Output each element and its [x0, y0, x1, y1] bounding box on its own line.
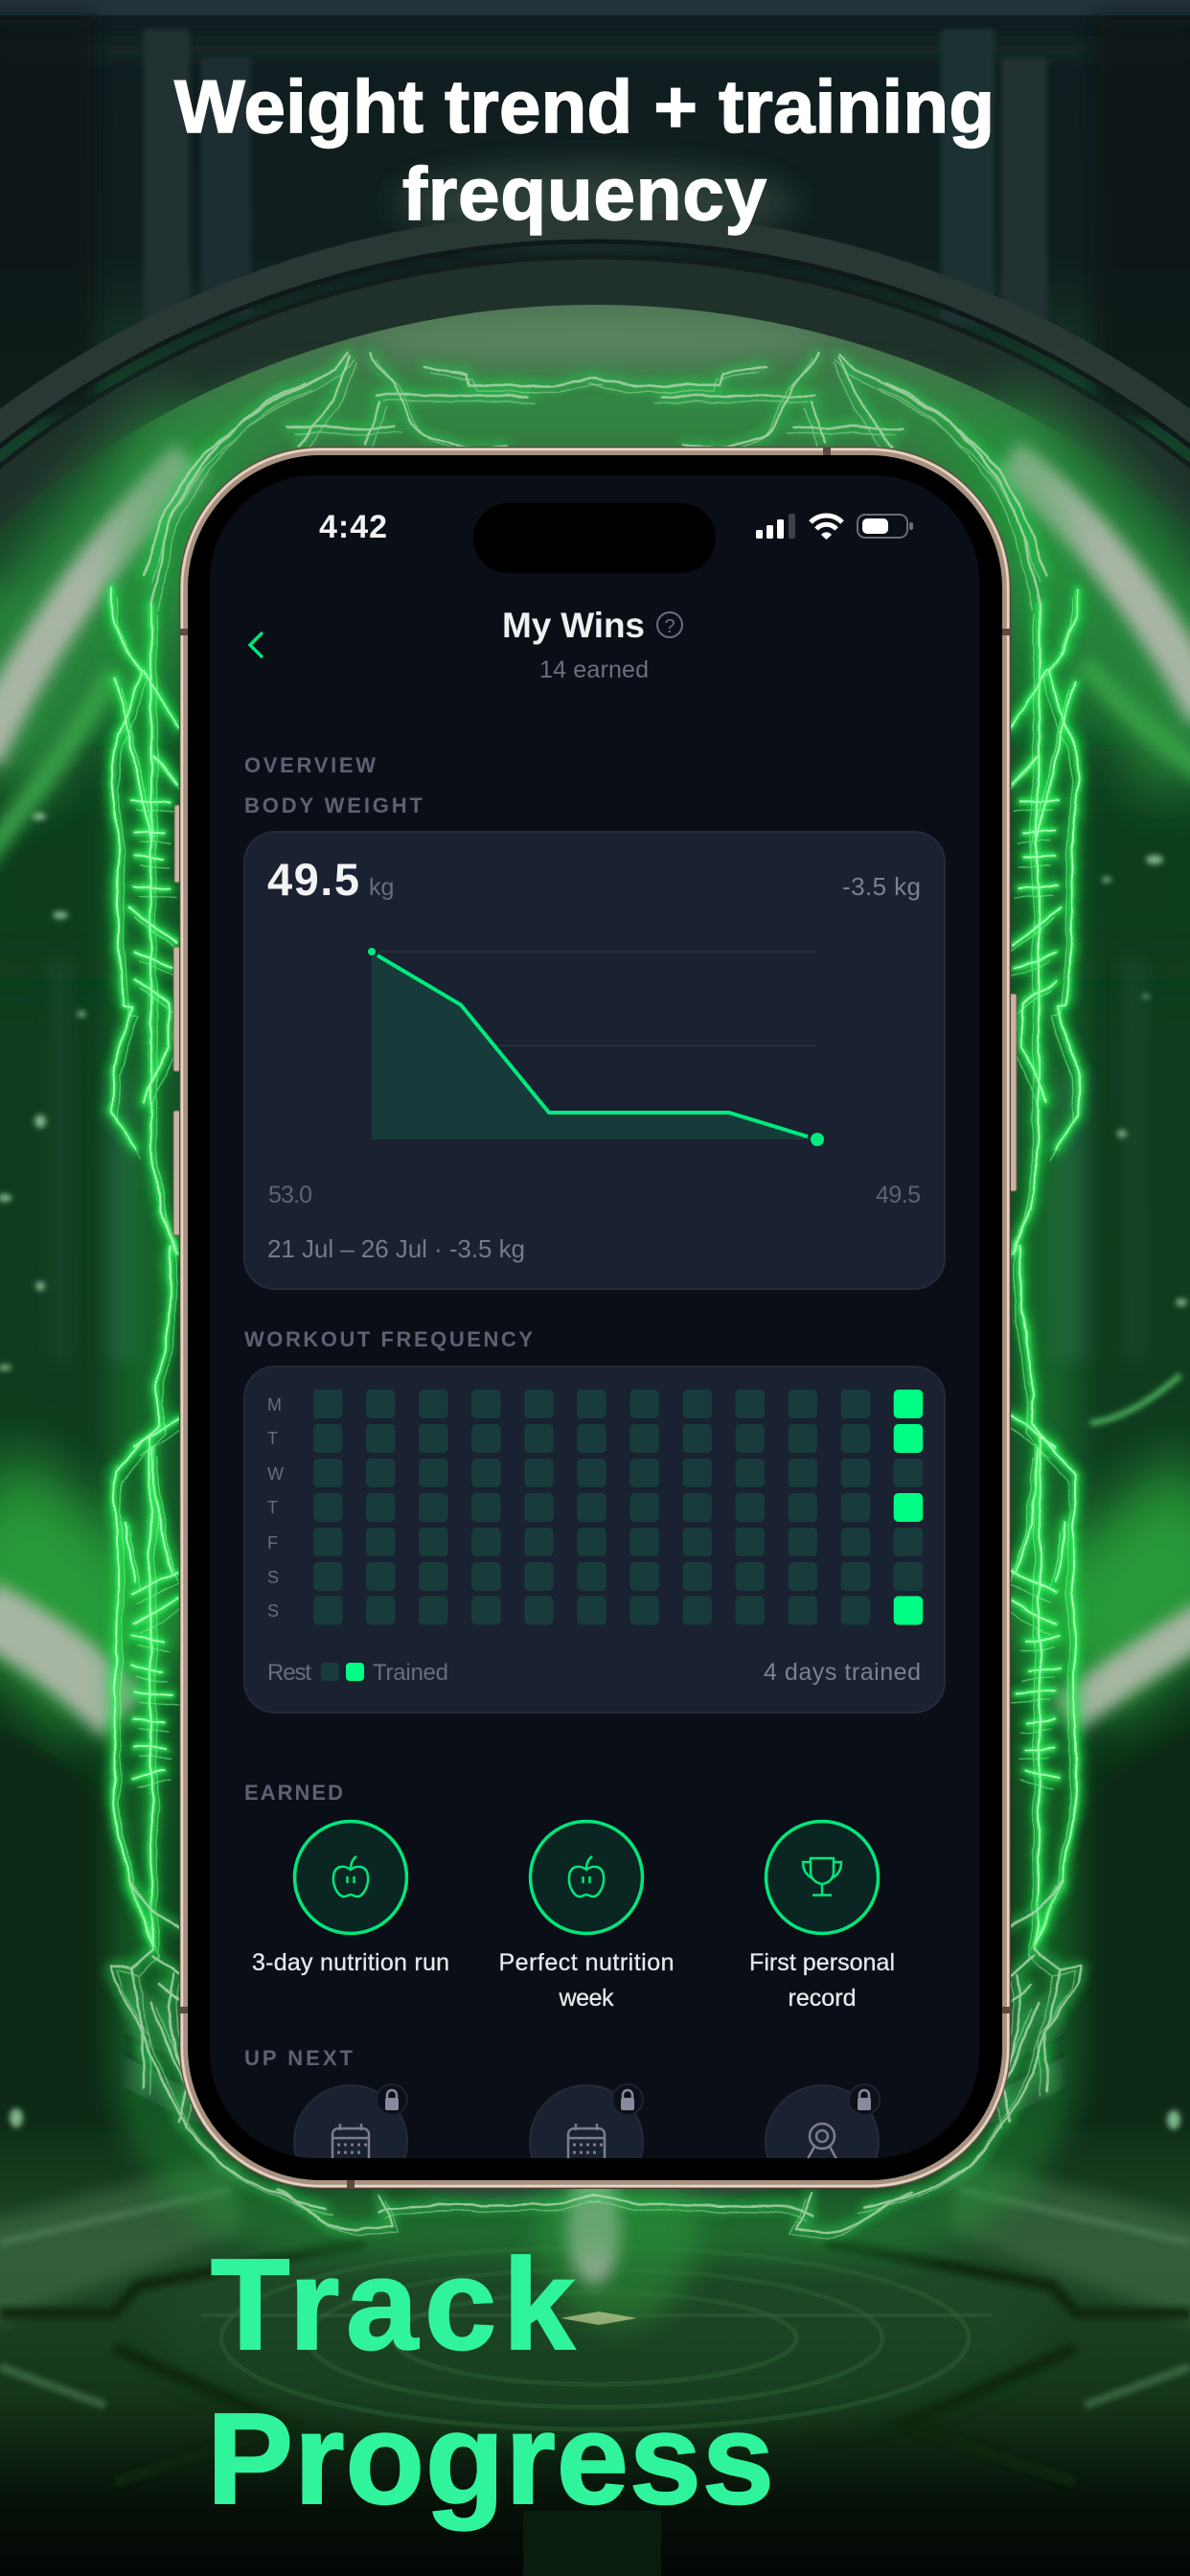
badge: 3-day nutrition run: 3-day nutrition run	[252, 1949, 449, 1976]
section label: body weight: BODY WEIGHT	[244, 794, 423, 817]
upper light swooshes	[0, 450, 1190, 862]
status bar time: 4:42	[319, 509, 387, 545]
badge: first personal record: record	[788, 1985, 857, 2012]
help icon: ?	[664, 616, 675, 637]
weekday labels: T	[267, 1429, 278, 1448]
green energy field	[0, 305, 1190, 746]
heading: weight trend: Weight trend + training	[174, 64, 995, 149]
badge: perfect nutrition week: Perfect nutrition	[498, 1949, 675, 1976]
heading: track progress: Track	[211, 2232, 576, 2377]
current weight: kg	[369, 874, 394, 901]
weekday labels: S	[267, 1568, 279, 1587]
heading: track progress: Progress	[207, 2386, 774, 2531]
section label: workout frequency: WORKOUT FREQUENCY	[244, 1327, 533, 1351]
help icon	[657, 612, 682, 637]
phone halo	[146, 407, 1044, 2223]
locked badge: calendar one	[293, 2083, 408, 2158]
weekday labels: M	[267, 1395, 282, 1414]
sparkles	[0, 813, 1187, 2129]
weight change: -3.5 kg	[842, 872, 921, 901]
days trained total: 4 days trained	[764, 1659, 921, 1686]
chart end label: 49.5	[876, 1182, 921, 1208]
weekday labels	[267, 1395, 284, 1621]
panel: workout frequency	[244, 1367, 945, 1713]
badge: perfect nutrition week	[498, 1821, 675, 2012]
section label: overview: OVERVIEW	[244, 753, 376, 777]
locked badge: medal	[765, 2083, 881, 2158]
date range: 21 Jul – 26 Jul · -3.5 kg	[267, 1234, 525, 1263]
badge: first personal record	[749, 1821, 895, 2012]
icon: apple	[333, 1856, 368, 1897]
phone frame	[184, 450, 1006, 2185]
phone device	[173, 447, 1017, 2198]
top corridor columns	[0, 0, 1190, 418]
weekday labels: T	[267, 1498, 278, 1517]
weekday labels: F	[267, 1533, 278, 1552]
section label: up next: UP NEXT	[244, 2046, 354, 2070]
badge: perfect nutrition week: week	[558, 1985, 614, 2012]
back chevron	[250, 632, 263, 657]
legend: Rest	[267, 1660, 311, 1686]
heading: weight trend: frequency	[402, 151, 767, 236]
icon: trophy	[803, 1858, 841, 1896]
wifi icon	[811, 516, 842, 540]
legend: Trained	[373, 1660, 448, 1686]
lightning around phone	[110, 354, 1080, 2237]
line chart	[368, 948, 824, 1146]
signal bars	[756, 514, 795, 539]
mid dark columns	[50, 958, 1146, 1361]
section label: earned: EARNED	[244, 1781, 343, 1805]
battery icon	[858, 515, 913, 538]
side buttons	[173, 805, 1017, 1235]
badge: 3-day nutrition run	[252, 1821, 449, 1976]
floor platform	[0, 2142, 1190, 2576]
locked badges row	[293, 2083, 881, 2158]
heatmap grid	[313, 1390, 923, 1625]
current weight: 49.5	[267, 854, 359, 905]
screen title: My Wins	[502, 606, 645, 645]
dynamic island	[473, 503, 716, 573]
legend	[267, 1660, 448, 1686]
locked badge: calendar two	[529, 2083, 644, 2158]
lower light swooshes	[0, 1524, 1190, 2128]
chart start label: 53.0	[268, 1182, 312, 1208]
weekday labels: S	[267, 1601, 279, 1621]
phone screen	[210, 475, 979, 2158]
earned count: 14 earned	[539, 656, 649, 683]
heading: track progress	[207, 2232, 774, 2531]
badge: first personal record: First personal	[749, 1949, 895, 1976]
icon: apple second	[569, 1856, 604, 1897]
weekday labels: W	[267, 1464, 284, 1484]
panel: body weight	[244, 832, 945, 1289]
arch ring	[0, 227, 1190, 2190]
heading: weight trend	[174, 64, 995, 236]
